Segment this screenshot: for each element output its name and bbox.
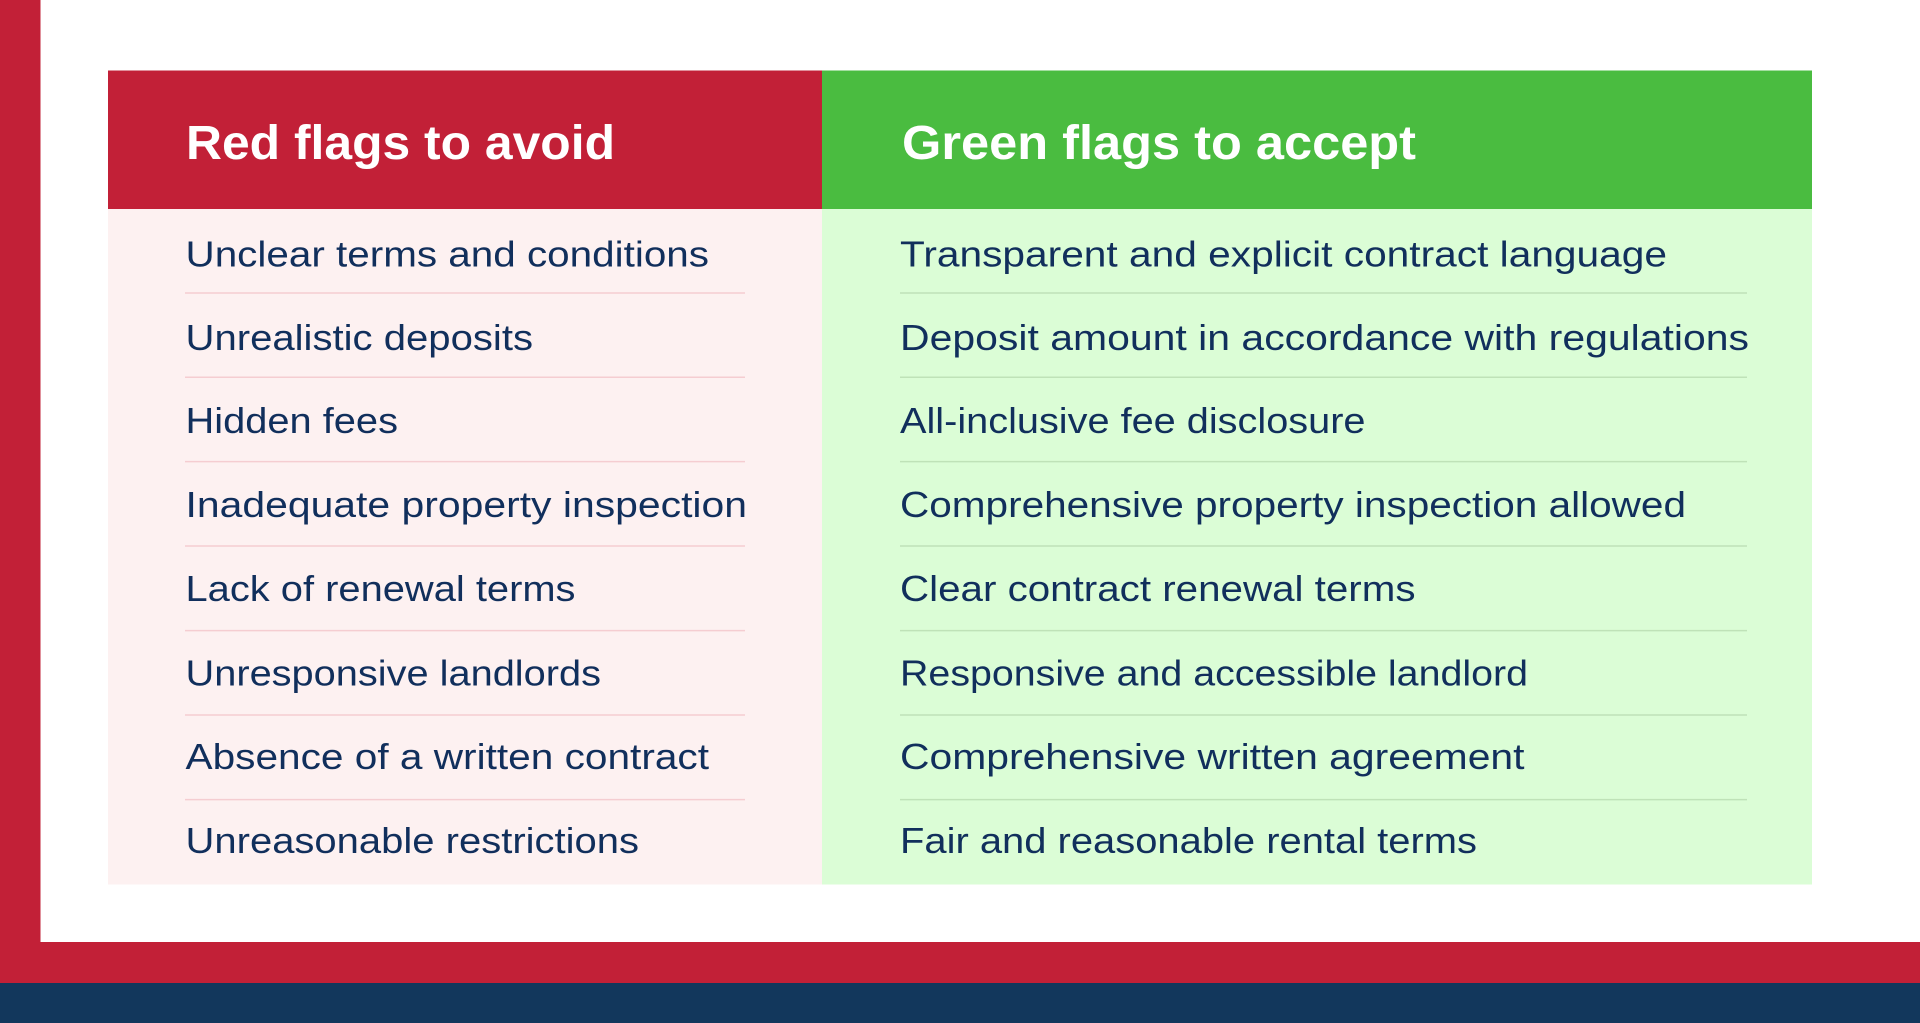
list: red flags: Unclear terms and conditions — [186, 233, 709, 274]
list: green flags: Comprehensive property inspection allowed — [900, 484, 1686, 525]
header: red flags — [108, 70, 822, 209]
list: red flags: Absence of a written contract — [186, 736, 709, 777]
panel: red flags to avoid — [108, 70, 822, 884]
list: green flags: Deposit amount in accordance with regulations — [900, 317, 1749, 358]
list: green flags: Responsive and accessible landlord — [900, 652, 1528, 693]
header: red flags: Red flags to avoid — [186, 117, 615, 170]
panel background: red flags — [108, 209, 822, 884]
list: red flags: Inadequate property inspection — [186, 484, 747, 525]
list: green flags — [900, 233, 1749, 861]
list: red flags: Lack of renewal terms — [186, 568, 576, 609]
panel background: green flags — [822, 209, 1812, 884]
header: green flags: Green flags to accept — [902, 117, 1416, 170]
list: red flags: Unresponsive landlords — [186, 652, 601, 693]
list: green flags: Comprehensive written agreement — [900, 736, 1524, 777]
panel: green flags to accept — [822, 70, 1812, 884]
list: red flags — [185, 233, 747, 861]
list: red flags: Unreasonable restrictions — [186, 820, 639, 861]
list: green flags: All-inclusive fee disclosure — [900, 400, 1366, 441]
list: green flags: Transparent and explicit contract language — [900, 233, 1667, 274]
list: red flags: Unrealistic deposits — [186, 317, 533, 358]
list: green flags: Clear contract renewal terms — [900, 568, 1416, 609]
header: green flags — [822, 70, 1812, 209]
list: red flags: Hidden fees — [186, 400, 398, 441]
list: green flags: Fair and reasonable rental terms — [900, 820, 1477, 861]
